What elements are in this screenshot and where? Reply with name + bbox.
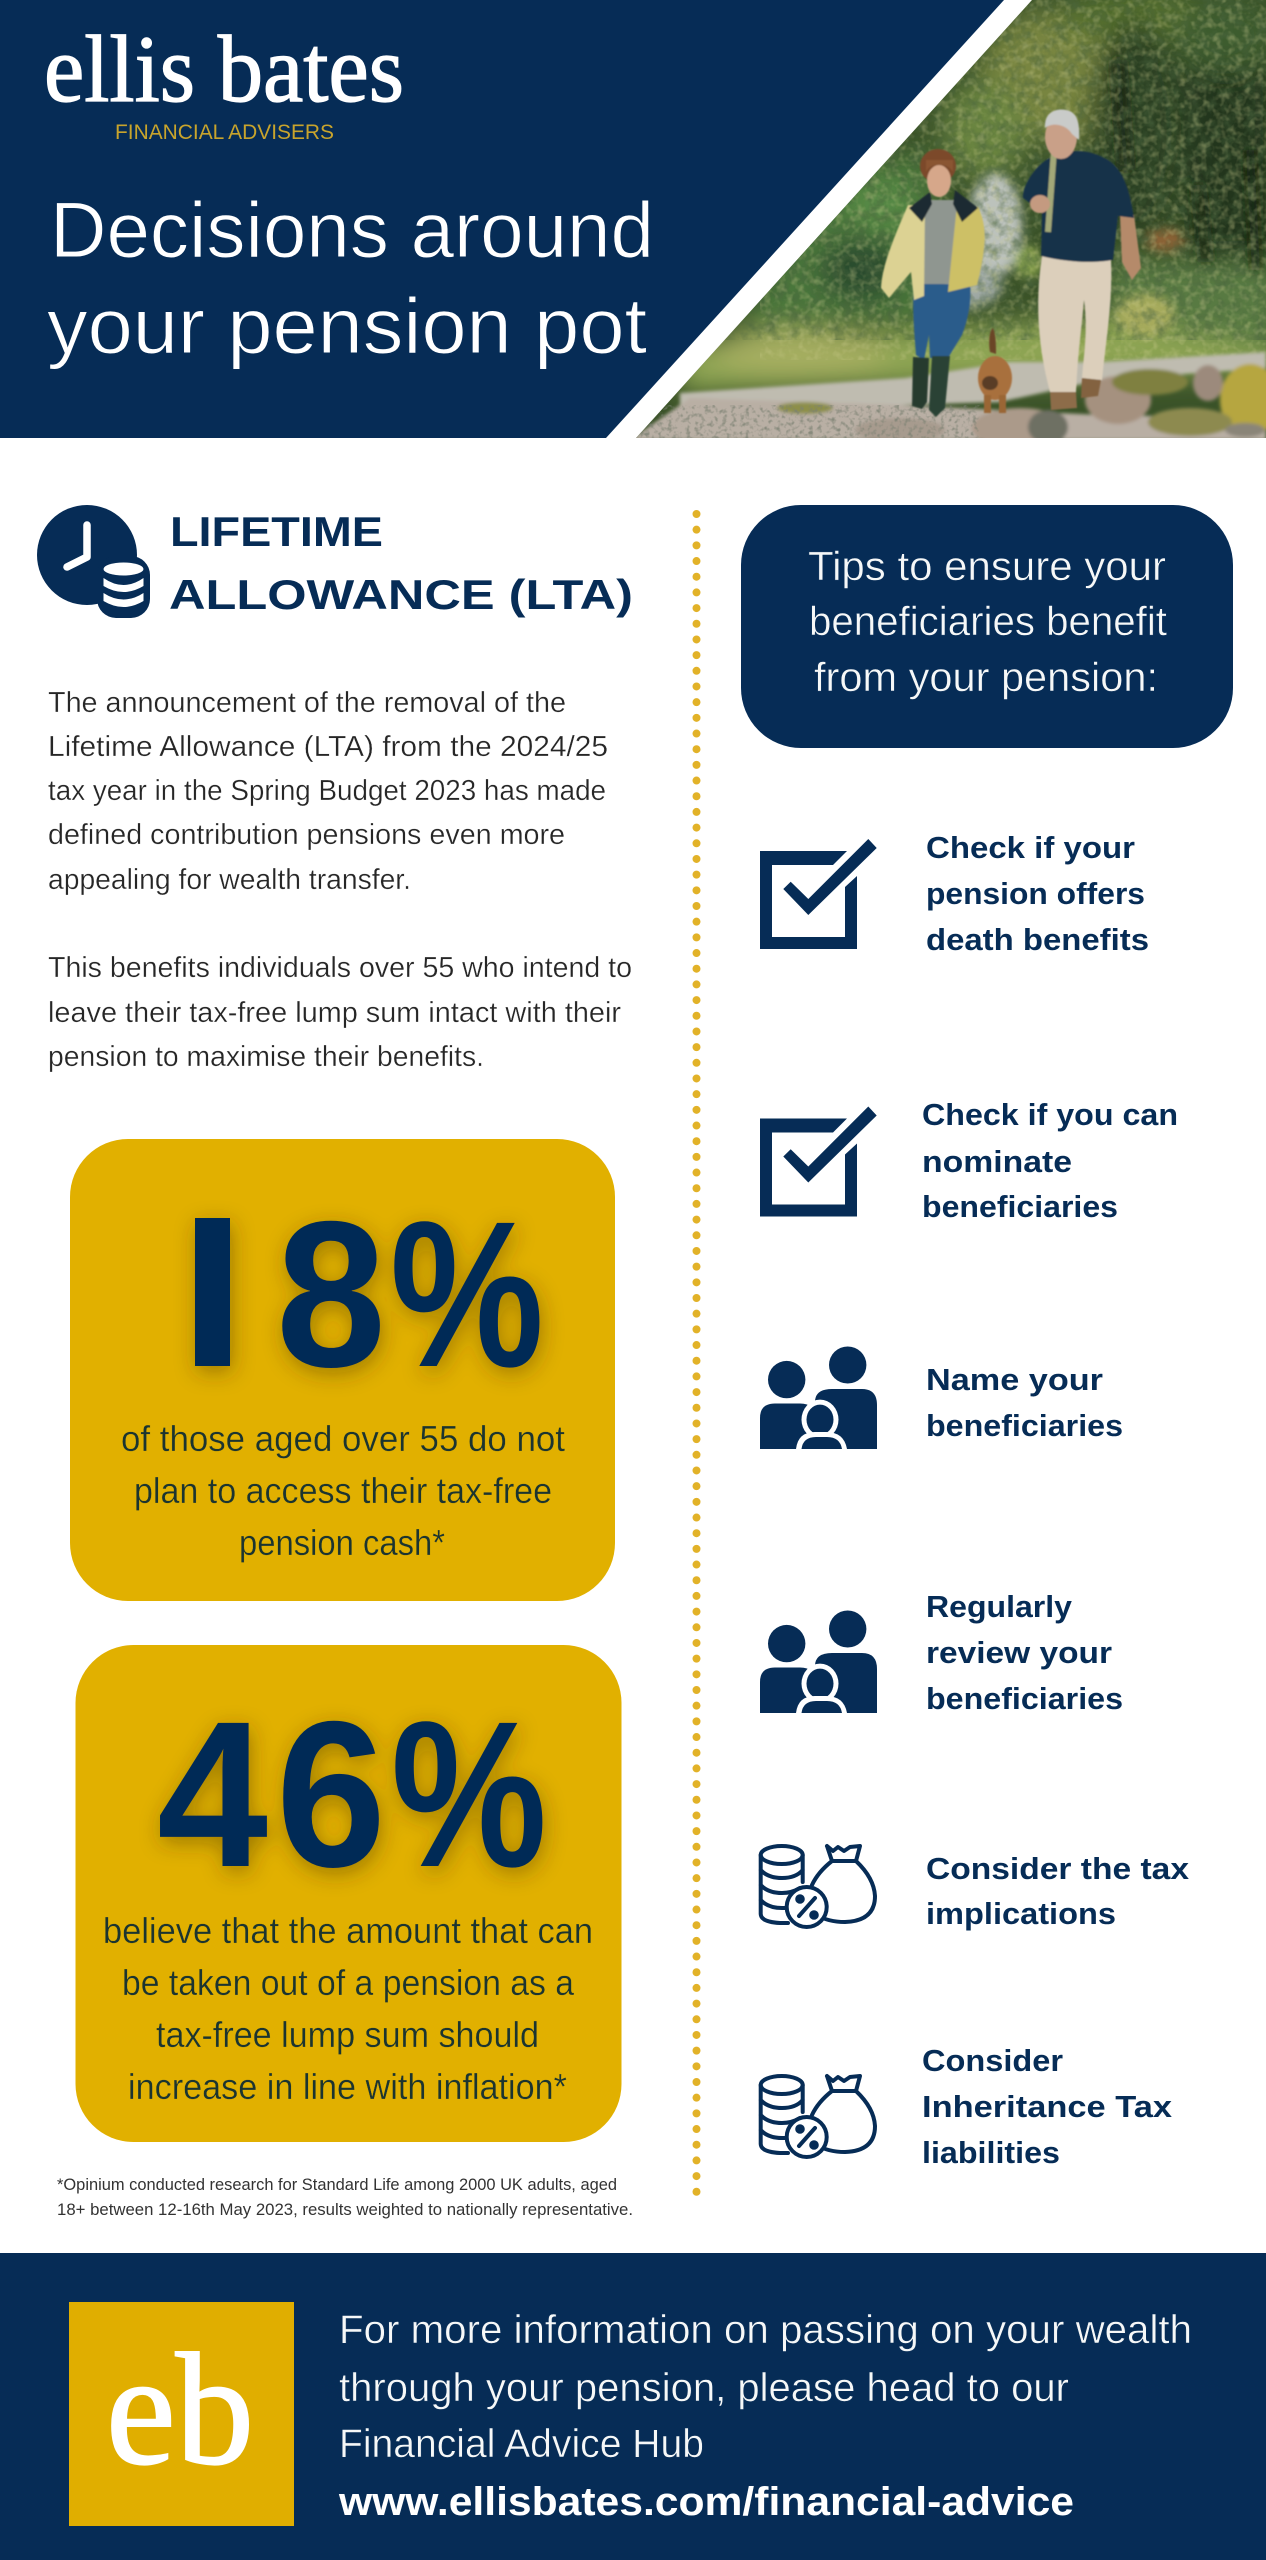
stat description: pension cash* [239, 1522, 445, 1563]
tip text: implications [926, 1896, 1116, 1931]
tip text: liabilities [922, 2135, 1060, 2170]
big number 46%: 6 [276, 1679, 386, 1911]
tip 3: name beneficiaries [760, 1346, 1123, 1449]
stat description: tax-free lump sum should [156, 2014, 539, 2055]
stat description: believe that the amount that can [103, 1910, 593, 1951]
tip text [926, 1589, 1123, 1716]
big number 18%: 8 [276, 1179, 386, 1411]
footer banner [0, 2253, 1266, 2560]
stat description: of those aged over 55 do not [121, 1418, 565, 1459]
tip text: Check if your [926, 830, 1135, 865]
man [1038, 256, 1111, 392]
tip text [926, 830, 1149, 957]
big number 18%: % [390, 1179, 544, 1411]
footnote: *Opinium conducted research for Standard Life among 2000 UK adults, aged [57, 2176, 617, 2194]
tip text: beneficiaries [926, 1681, 1123, 1716]
footer message: www.ellisbates.com/financial-advice [338, 2480, 1074, 2524]
footer message: Financial Advice Hub [339, 2422, 704, 2466]
stat card: 46% [76, 1645, 622, 2142]
tip text: nominate [922, 1144, 1072, 1179]
second paragraph: pension to maximise their benefits. [48, 1041, 484, 1073]
tip text: Inheritance Tax [922, 2089, 1173, 2124]
icon: coins, money bag and percent [761, 2076, 875, 2157]
logo wordmark: ellis bates [44, 16, 404, 122]
tip text: Consider the tax [926, 1851, 1190, 1886]
header navy background [0, 0, 1266, 438]
header banner [0, 0, 1266, 448]
footnote: 18+ between 12-16th May 2023, results weighted to nationally representative. [57, 2201, 633, 2219]
main title: your pension pot [47, 281, 647, 370]
icon: checkbox [760, 1106, 877, 1216]
heading: LIFETIME [170, 508, 383, 555]
main title [47, 185, 654, 370]
panel: tips heading: Tips to ensure your [808, 543, 1166, 589]
woman [913, 283, 970, 360]
tip 1: death benefits [760, 830, 1149, 957]
panel: tips heading [741, 505, 1233, 748]
second paragraph [48, 952, 632, 1073]
icon: clock and coin stack [37, 505, 150, 618]
intro paragraph: The announcement of the removal of the [48, 687, 566, 719]
heading [169, 508, 633, 618]
stat description [103, 1910, 593, 2107]
logo: eb square [69, 2302, 294, 2526]
tip text: Check if you can [922, 1097, 1178, 1132]
icon: checkbox [760, 839, 877, 949]
footer message [338, 2308, 1192, 2524]
big number 46% [157, 1679, 547, 1911]
intro paragraph [48, 687, 608, 896]
stat description [121, 1418, 565, 1563]
tip text: pension offers [926, 876, 1145, 911]
stat description: be taken out of a pension as a [122, 1962, 575, 2003]
second paragraph: This benefits individuals over 55 who intend to [48, 952, 632, 984]
heading: ALLOWANCE (LTA) [169, 571, 633, 618]
panel: tips heading: beneficiaries benefit [809, 598, 1168, 644]
footer message: through your pension, please head to our [339, 2366, 1069, 2410]
icon: family [760, 1610, 877, 1713]
photo: couple walking a dog outdoors [620, 0, 1266, 448]
logo: eb square: eb [106, 2320, 254, 2498]
logo wordmark: FINANCIAL ADVISERS [115, 121, 334, 144]
tip text: Name your [926, 1362, 1103, 1397]
tip text [922, 1097, 1178, 1224]
tip text [922, 2043, 1173, 2170]
second paragraph: leave their tax-free lump sum intact with their [48, 997, 621, 1029]
tip 6: inheritance tax [761, 2043, 1173, 2170]
icon: coins, money bag and percent [761, 1846, 875, 1927]
tip text [926, 1851, 1190, 1931]
stat card: 18% [70, 1139, 615, 1601]
white diagonal band [606, 0, 1266, 438]
intro paragraph: tax year in the Spring Budget 2023 has made [48, 775, 606, 807]
tip 2: nominate [760, 1097, 1178, 1224]
big number 18% [183, 1210, 555, 1388]
tip text: Consider [922, 2043, 1063, 2078]
tip text: beneficiaries [922, 1189, 1118, 1224]
tip text: beneficiaries [926, 1408, 1123, 1443]
panel: lifetime allowance [37, 505, 633, 1073]
intro paragraph: appealing for wealth transfer. [48, 864, 411, 896]
big number 46%: % [391, 1679, 547, 1911]
stat description: plan to access their tax-free [134, 1470, 552, 1511]
tip 5: tax implications [761, 1846, 1190, 1931]
gravel texture [640, 405, 980, 438]
big number 46%: 4 [157, 1679, 268, 1911]
tip text: death benefits [926, 922, 1149, 957]
tip text: Regularly [926, 1589, 1073, 1624]
intro paragraph: defined contribution pensions even more [48, 819, 565, 851]
footer message: For more information on passing on your wealth [339, 2308, 1192, 2352]
intro paragraph: Lifetime Allowance (LTA) from the 2024/25 [48, 731, 608, 763]
foliage texture [724, 0, 1266, 340]
main title: Decisions around [50, 185, 654, 274]
icon: family [760, 1346, 877, 1449]
big number 18%: 1 [150, 1179, 266, 1411]
tip 4: review beneficiaries [760, 1589, 1123, 1716]
tip text [926, 1362, 1123, 1443]
stat description: increase in line with inflation* [128, 2066, 567, 2107]
tip text: review your [926, 1635, 1112, 1670]
footnote [57, 2176, 633, 2219]
panel: tips heading: from your pension: [814, 654, 1158, 700]
dog [989, 328, 996, 354]
